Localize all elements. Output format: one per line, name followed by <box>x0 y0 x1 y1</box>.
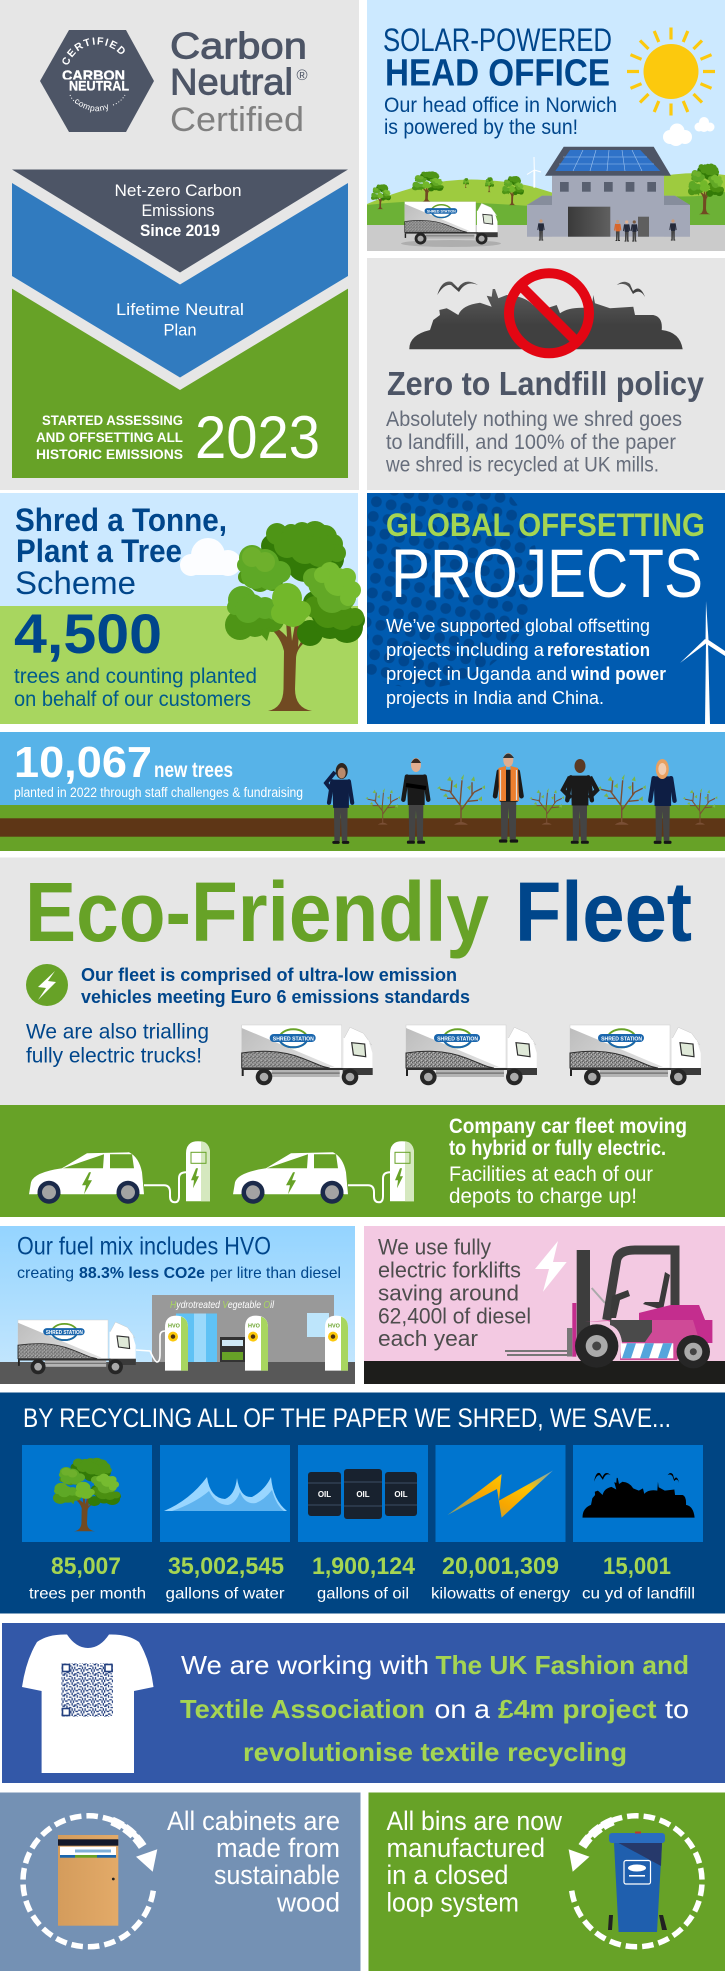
heading: Carbon Neutral Certified <box>170 26 308 139</box>
heading: Carbon Neutral Certified: ® <box>296 67 308 84</box>
tile: oil barrels: OIL <box>394 1490 408 1499</box>
tile: oil barrels: OIL <box>318 1490 331 1499</box>
icon: HVO fuel station: Hydrotreated Vegetable Oil <box>170 1299 275 1311</box>
text: 88.3% less CO2e: per litre than diesel <box>210 1265 341 1282</box>
text: ultra-low emission vehicles <box>81 964 470 1007</box>
chevron: started assessing 2023: AND OFFSETTING ALL <box>36 429 183 445</box>
icon: dotted globe <box>367 493 538 688</box>
panel: electric forklifts <box>364 1226 725 1384</box>
icon: certified carbon neutral hexagon badge: company <box>75 99 108 112</box>
text: UK Fashion and Textile Association project: £4m project <box>498 1694 657 1724</box>
icon: clouds <box>663 117 714 146</box>
text: 88.3% less CO2e <box>17 1265 341 1282</box>
icon: wind turbine <box>680 601 725 724</box>
text: offsetting projects description: wind power <box>570 664 666 684</box>
icon: landscape trees <box>371 164 724 214</box>
text: company car fleet: Facilities at each of our <box>449 1163 653 1186</box>
text: trees and counting planted <box>14 665 257 711</box>
heading: shred a tonne plant a tree scheme: Shred a Tonne, <box>15 502 227 538</box>
text: bins closed loop: manufactured <box>386 1833 545 1863</box>
heading: shred a tonne plant a tree scheme <box>15 502 227 601</box>
text: electric forklifts saving: 62,400l of diesel <box>378 1304 531 1328</box>
stat: 4,500 trees: 4,500 <box>14 602 162 665</box>
icon: electric truck 2: SHRED STATION <box>437 1036 478 1042</box>
text: electric forklifts saving: each year <box>378 1326 478 1351</box>
chevron: net-zero carbon emissions <box>12 170 348 272</box>
text: cabinets sustainable wood: All cabinets are <box>167 1806 340 1836</box>
icon: sun <box>627 28 715 116</box>
icon: staff member, blonde woman <box>650 759 675 844</box>
panel: textile recycling <box>2 1623 725 1783</box>
icon: staff outside the office <box>538 219 676 241</box>
heading: shred a tonne plant a tree scheme: Plant a Tree <box>16 533 182 569</box>
icon: HVO fuel station <box>152 1295 348 1371</box>
text: ultra-low emission vehicles: Our fleet is comprised of ultra-low emission <box>81 964 457 985</box>
text: offsetting projects description: project in Uganda and <box>386 664 567 684</box>
heading: global offsetting projects <box>386 507 705 612</box>
text: company car fleet: Company car fleet moving <box>449 1115 687 1138</box>
icon: certified carbon neutral hexagon badge: NEUTRAL <box>69 78 129 94</box>
icon: staff member, man with folded arms <box>403 758 428 844</box>
panel: eco-friendly fleet <box>0 858 725 1105</box>
stats: recycling savings numbers: 15,001 <box>603 1553 671 1580</box>
icon: recycling loop arrow <box>23 1816 157 1947</box>
tile: trees <box>22 1445 152 1542</box>
chevron: lifetime neutral plan: Lifetime Neutral <box>116 300 244 319</box>
stat: 10,067 new trees: new trees <box>154 759 233 782</box>
text: recycling savings labels: gallons of oil <box>317 1586 409 1602</box>
tile: landfill <box>573 1445 703 1542</box>
text: recycling savings labels: trees per month <box>29 1586 146 1602</box>
chevron: started assessing 2023: 2023 <box>195 404 320 471</box>
panel: solar-powered head office <box>367 0 725 251</box>
icon: saplings <box>365 774 717 825</box>
chevron: net-zero carbon emissions: Net-zero Carbon <box>114 181 242 200</box>
panel: fuel mix HVO <box>0 1226 355 1384</box>
stats: recycling savings numbers: 35,002,545 <box>168 1553 284 1580</box>
text: electric forklifts saving <box>378 1234 531 1351</box>
panel: company car fleet <box>0 1105 725 1217</box>
heading: Carbon Neutral Certified: Certified <box>170 101 304 139</box>
panel: zero to landfill policy <box>367 258 725 490</box>
icon: wind turbine <box>527 157 541 188</box>
tile: energy bolt <box>436 1445 566 1542</box>
panel: global offsetting projects <box>367 493 725 724</box>
text: powered by the sun <box>384 94 617 139</box>
stats: recycling savings numbers <box>51 1553 671 1580</box>
text: trees and counting planted: on behalf of our customers <box>14 688 251 711</box>
icon: blue wheelie bin <box>608 1832 667 1932</box>
icon: certified carbon neutral hexagon badge <box>40 30 154 132</box>
stat: 10,067 new trees <box>14 738 233 787</box>
heading: solar-powered head office: HEAD OFFICE <box>385 52 610 94</box>
text: planted in 2022: planted in 2022 through staff challenges & fundraising <box>14 785 303 800</box>
text: recycling savings labels: kilowatts of energy <box>431 1586 570 1602</box>
text: UK Fashion and Textile Association project: revolutionise textile recycling <box>243 1737 627 1767</box>
text: recycling savings labels: gallons of water <box>166 1586 285 1602</box>
text: UK Fashion and Textile Association project: We are working with <box>181 1650 429 1680</box>
stat: 10,067 new trees: 10,067 <box>14 738 152 787</box>
text: cabinets sustainable wood: wood <box>276 1888 340 1918</box>
heading: Carbon Neutral Certified: Carbon <box>170 26 307 66</box>
panel: carbon neutral certified <box>0 0 359 490</box>
text: powered by the sun: Our head office in Norwich <box>384 94 617 117</box>
icon: electric truck 3: SHRED STATION <box>601 1036 642 1042</box>
icon: white lightning bolt <box>535 1241 567 1292</box>
icon: shred station truck <box>401 202 501 247</box>
landscape: hills and road <box>367 173 725 251</box>
panel: shred a tonne plant a tree <box>0 493 365 724</box>
panel: 10,067 new trees <box>0 732 725 851</box>
heading: zero to landfill policy: Zero to Landfill policy <box>387 365 705 402</box>
text: offsetting projects description: reforestation <box>547 640 650 660</box>
text: 88.3% less CO2e: creating <box>17 1265 74 1282</box>
stats: recycling savings numbers: 1,900,124 <box>312 1553 416 1580</box>
icon: HVO fuel station: HVO <box>168 1324 181 1330</box>
text: electric forklifts saving: We use fully <box>378 1234 491 1260</box>
text: 88.3% less CO2e: 88.3% less CO2e <box>79 1265 205 1282</box>
icon: electric truck 2 <box>406 1025 537 1085</box>
icon: certified carbon neutral hexagon badge: CERTIFIED <box>62 37 125 64</box>
heading: eco-friendly fleet: Eco-Friendly <box>25 865 489 959</box>
tile: oil barrels: OIL <box>356 1490 370 1499</box>
text: cabinets sustainable wood: sustainable <box>214 1860 340 1890</box>
icon: cloud <box>180 538 241 576</box>
text: UK Fashion and Textile Association project: Textile Association <box>180 1694 425 1724</box>
icon: truck refuelling <box>18 1320 165 1374</box>
chevron: started assessing 2023: STARTED ASSESSING <box>42 412 183 428</box>
icon: staff member in orange vest <box>495 753 521 843</box>
text: offsetting projects description: projects in India and China. <box>386 688 604 708</box>
icon: electric truck 3 <box>570 1025 701 1085</box>
icon: red prohibition sign <box>509 273 589 353</box>
text: cabinets sustainable wood <box>167 1806 340 1918</box>
panel: by recycling we save <box>0 1392 725 1614</box>
heading: shred a tonne plant a tree scheme: Scheme <box>15 565 136 601</box>
icon: electric car and charger 1 <box>29 1141 210 1204</box>
icon: shred station truck: SHRED STATION <box>427 209 456 214</box>
text: recycled at UK mills: Absolutely nothing we shred goes <box>386 408 682 431</box>
text: UK Fashion and Textile Association project <box>180 1650 689 1767</box>
stats: recycling savings numbers: 85,007 <box>51 1553 121 1580</box>
panel: sustainable wood cabinets <box>0 1792 360 1971</box>
heading: solar-powered head office: SOLAR-POWERED <box>383 22 612 58</box>
chevron: net-zero carbon emissions: Since 2019 <box>140 221 220 240</box>
icon: HVO fuel station: HVO <box>328 1324 341 1330</box>
heading: global offsetting projects: GLOBAL OFFSETTING <box>386 507 705 543</box>
text: bins closed loop: in a closed <box>386 1860 508 1890</box>
text: offsetting projects description: We’ve supported global offsetting <box>386 616 650 636</box>
icon: electric car and charger 2 <box>233 1141 414 1204</box>
text: recycled at UK mills: to landfill, and 100% of the paper <box>386 431 676 454</box>
icon: staff member, hands on hips <box>563 759 597 844</box>
icon: electric truck 1 <box>242 1025 373 1085</box>
icon: HVO fuel station: HVO <box>248 1324 261 1330</box>
panel: closed loop bins <box>368 1792 725 1971</box>
chevron: lifetime neutral plan <box>12 183 348 378</box>
text: recycling savings labels: cu yd of landfill <box>582 1586 695 1602</box>
text: powered by the sun: is powered by the sun! <box>384 116 578 139</box>
icon: certified carbon neutral hexagon badge: CARBON <box>62 67 125 83</box>
text: recycled at UK mills <box>385 408 682 476</box>
icon: wooden cabinet <box>58 1835 118 1926</box>
text: company car fleet: depots to charge up! <box>449 1185 637 1208</box>
stats: recycling savings numbers: 20,001,309 <box>442 1553 559 1580</box>
text: offsetting projects description: projects including a <box>386 640 545 660</box>
icon: electric truck 1: SHRED STATION <box>273 1036 314 1042</box>
text: recycled at UK mills: we shred is recycled at UK mills. <box>385 454 659 476</box>
text: fuel mix includes HVO: Our fuel mix includes HVO <box>17 1232 271 1260</box>
chevron: lifetime neutral plan: Plan <box>164 320 196 340</box>
text: recycling savings labels <box>29 1586 695 1602</box>
icon: t-shirt with QR code <box>22 1634 154 1773</box>
tile: water <box>160 1445 290 1542</box>
heading: solar-powered head office <box>383 22 612 94</box>
text: bins closed loop: loop system <box>386 1888 519 1918</box>
icon: landfill silhouette <box>409 282 683 349</box>
heading: Carbon Neutral Certified: Neutral <box>170 62 293 102</box>
text: electric forklifts saving: saving around <box>378 1280 519 1306</box>
icon: green lightning circle <box>26 964 68 1006</box>
text: ultra-low emission vehicles: vehicles meeting Euro 6 emissions standards <box>81 986 470 1007</box>
chevron: net-zero carbon emissions: Emissions <box>142 201 214 220</box>
text: trees and counting planted: trees and counting planted <box>14 665 257 688</box>
chevron: started assessing 2023: HISTORIC EMISSIONS <box>36 446 183 462</box>
text: offsetting projects description <box>386 616 666 708</box>
text: UK Fashion and Textile Association project: on a <box>434 1694 491 1724</box>
icon: staff member, woman in navy <box>326 763 352 844</box>
text: cabinets sustainable wood: made from <box>216 1833 340 1863</box>
icon: head office building with solar roof <box>527 147 690 237</box>
text: trialling electric trucks <box>26 1020 209 1068</box>
text: trialling electric trucks: We are also trialling <box>26 1020 209 1044</box>
text: UK Fashion and Textile Association project: to <box>665 1694 689 1724</box>
text: company car fleet <box>449 1115 687 1208</box>
chevron: started assessing 2023 <box>12 289 348 478</box>
text: bins closed loop <box>386 1806 562 1918</box>
text: trialling electric trucks: fully electric trucks! <box>26 1044 202 1068</box>
icon: pink electric forklift <box>505 1250 712 1368</box>
text: electric forklifts saving: electric forklifts <box>378 1258 521 1283</box>
heading: eco-friendly fleet: Fleet <box>515 865 692 959</box>
icon: large tree <box>225 521 365 711</box>
icon: recycling loop arrow <box>569 1816 702 1947</box>
tile: oil barrels <box>298 1445 428 1542</box>
text: company car fleet: to hybrid or fully electric. <box>449 1137 666 1160</box>
text: UK Fashion and Textile Association project: The UK Fashion and <box>436 1650 689 1680</box>
text: bins closed loop: All bins are now <box>386 1806 562 1836</box>
icon: truck refuelling: SHRED STATION <box>46 1330 83 1336</box>
